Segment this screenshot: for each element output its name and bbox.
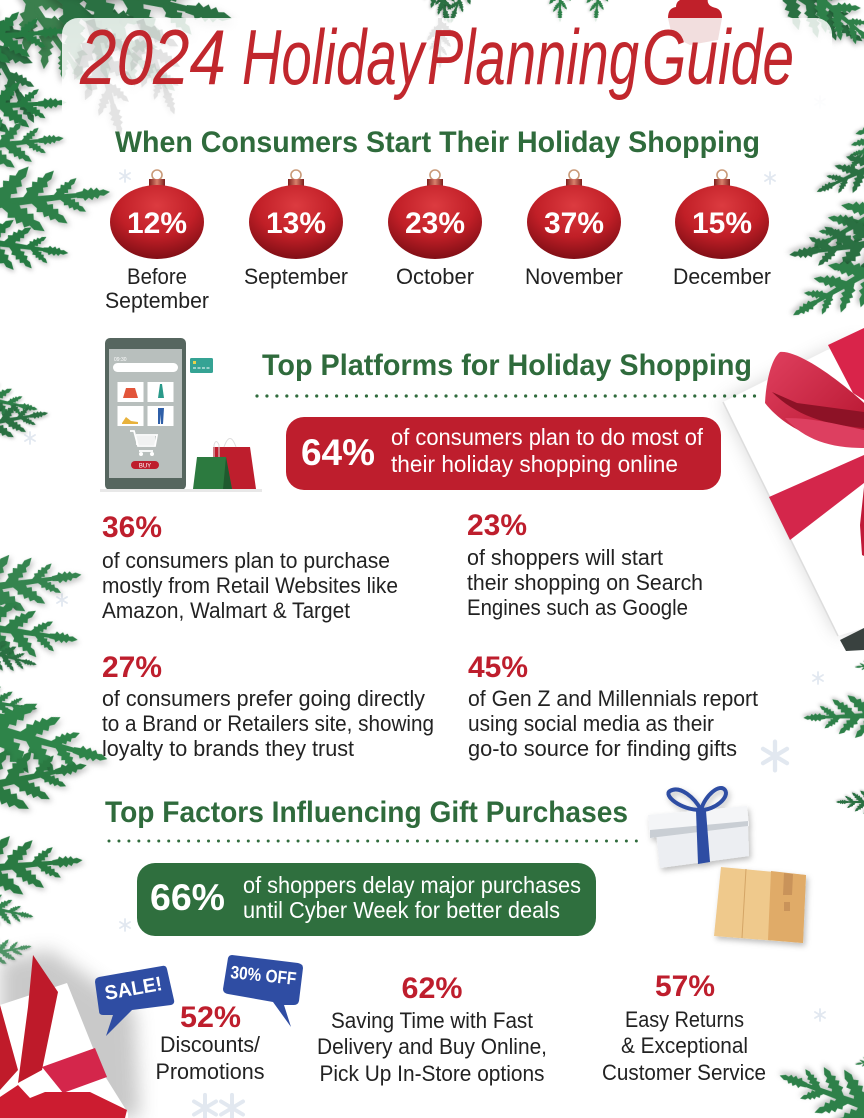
ornament: 15% December (673, 170, 771, 289)
stat: 62% saving time (317, 972, 547, 1086)
stat: 27% brand sites: 27% (102, 651, 162, 684)
stat: 45% social media: 45% (468, 651, 528, 684)
left evergreen branch 4 (0, 680, 118, 971)
top evergreen sprigs (413, 0, 616, 29)
stat: 36% retail websites: of consumers plan to purchase (102, 548, 390, 573)
stat: 45% social media: using social media as their (468, 711, 714, 736)
icon: cardboard parcel (714, 867, 806, 943)
icon: white gift box with blue ribbon (648, 788, 749, 868)
top-right evergreen branch (756, 0, 864, 69)
stat: 62% saving time: Pick Up In-Store options (320, 1061, 544, 1086)
title: Holiday (242, 13, 427, 101)
heading: top platforms: Top Platforms for Holiday Shopping (262, 349, 752, 382)
ornament: 37% November (525, 170, 623, 289)
stat: 45% social media (468, 651, 758, 761)
dotted divider (109, 840, 637, 842)
icon: sale speech bubble: SALE! (103, 973, 164, 1005)
heading: top factors: Top Factors Influencing Gift Purchases (105, 796, 628, 829)
callout: 64% online: 64% (301, 432, 375, 473)
ornament: 37% November: November (525, 264, 623, 289)
stat: 23% search engines: 23% (467, 509, 527, 542)
stat: 57% easy returns: 57% (655, 970, 715, 1003)
title: 2024 (79, 13, 226, 101)
stat: 36% retail websites (102, 511, 398, 623)
callout: 64% online (286, 417, 721, 490)
stat: 23% search engines: Engines such as Google (467, 595, 688, 620)
title: Guide (642, 13, 794, 101)
title: Planning (427, 13, 639, 101)
ornament: 37% November: 37% (544, 207, 604, 240)
icon: smartphone shopping: BUY (139, 464, 151, 470)
ornament: 12% before September: 12% (127, 207, 187, 240)
stat: 27% brand sites: loyalty to brands they trust (102, 736, 354, 761)
stat: 45% social media: go-to source for finding gifts (468, 736, 737, 761)
stat: 45% social media: of Gen Z and Millennials report (468, 686, 758, 711)
icon: smartphone shopping: 09:30 (114, 357, 127, 363)
callout: 66% cyber week: of shoppers delay major purchases (243, 872, 581, 898)
ornament: 12% before September (105, 170, 209, 313)
ornament: 15% December: 15% (692, 207, 752, 240)
icon: sale speech bubble (95, 966, 174, 1036)
icon: 30% off speech bubble: 30% OFF (230, 962, 297, 989)
ghost foliage seen through title panel (54, 9, 722, 145)
heading: when consumers start: When Consumers Start Their Holiday Shopping (115, 126, 760, 159)
ornament: 23% October (388, 170, 482, 289)
stat: 23% search engines (467, 509, 703, 620)
ornament: 13% September: 13% (266, 207, 326, 240)
ornament: 13% September (244, 170, 348, 289)
stat: 27% brand sites: to a Brand or Retailers site, showing (102, 711, 434, 736)
stat: 27% brand sites: of consumers prefer going directly (102, 686, 425, 711)
callout: 66% cyber week: 66% (150, 877, 225, 918)
icon: smartphone shopping (105, 338, 186, 490)
right evergreen branches (777, 109, 864, 344)
stat: 23% search engines: of shoppers will start (467, 545, 663, 570)
ornament: 23% October: October (396, 264, 474, 289)
stat: 52% discounts: Discounts/ (160, 1032, 261, 1057)
stat: 27% brand sites (102, 651, 434, 761)
ornament: 13% September: September (244, 264, 348, 289)
icon: shopping bags (100, 438, 262, 492)
left evergreen sprig 2 (0, 373, 52, 447)
callout: 66% cyber week (137, 863, 596, 936)
dotted divider (257, 394, 756, 398)
left evergreen sprig 3 (0, 539, 86, 682)
callout: 64% online: of consumers plan to do most of (391, 424, 703, 450)
stat: 52% discounts: 52% (180, 1001, 241, 1034)
stat: 57% easy returns (602, 970, 766, 1085)
stat: 52% discounts (156, 1001, 264, 1084)
callout: 64% online: their holiday shopping online (391, 451, 678, 477)
stat: 36% retail websites: mostly from Retail Websites like (102, 573, 398, 598)
ornament: 23% October: 23% (405, 207, 465, 240)
stat: 57% easy returns: Easy Returns (625, 1007, 744, 1032)
icon: 30% off speech bubble (223, 955, 303, 1027)
right evergreen sprigs (768, 657, 864, 1118)
top-left evergreen branches (0, 0, 244, 283)
gift with red ribbon, bottom left (0, 950, 140, 1118)
stat: 23% search engines: their shopping on Search (467, 570, 703, 595)
stat: 62% saving time: Delivery and Buy Online, (317, 1034, 547, 1059)
stat: 36% retail websites: 36% (102, 511, 162, 544)
stat: 52% discounts: Promotions (156, 1059, 264, 1084)
callout: 66% cyber week: until Cyber Week for better deals (243, 897, 560, 923)
title panel (62, 18, 832, 126)
gift with red ribbon, right edge (723, 328, 864, 651)
stat: 57% easy returns: & Exceptional (621, 1033, 748, 1058)
stat: 36% retail websites: Amazon, Walmart & Target (102, 598, 350, 623)
stat: 57% easy returns: Customer Service (602, 1060, 766, 1085)
stat: 62% saving time: Saving Time with Fast (331, 1008, 533, 1033)
title (79, 13, 794, 101)
stat: 62% saving time: 62% (402, 972, 462, 1005)
red berries behind title (668, 0, 722, 18)
ornament: 12% before September: September (105, 288, 209, 313)
icon: credit card (190, 358, 213, 373)
ornament: 12% before September: Before (127, 264, 187, 289)
ornament: 15% December: December (673, 264, 771, 289)
